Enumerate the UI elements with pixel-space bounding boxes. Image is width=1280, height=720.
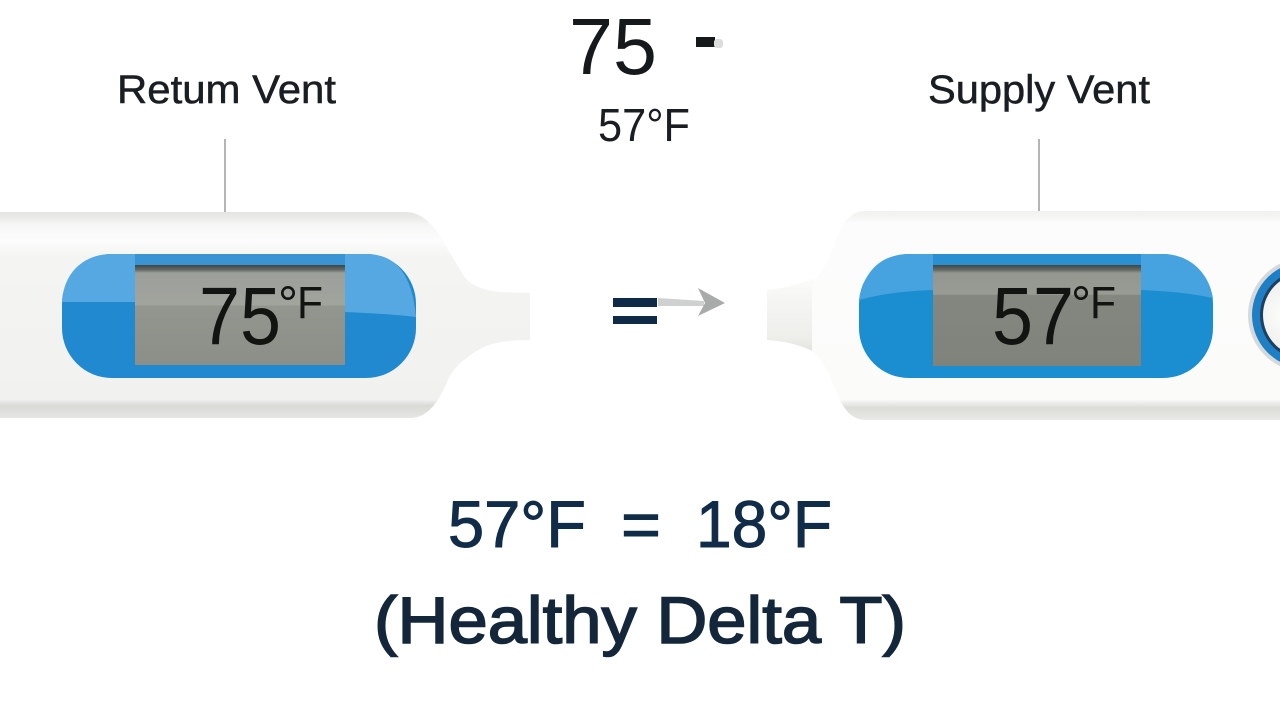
top equation: 57°F: 57°F <box>598 99 690 151</box>
leader line: supply vent <box>1038 139 1040 211</box>
LCD reading: ° <box>278 276 298 332</box>
LCD reading: 57 <box>992 271 1074 362</box>
result equation <box>448 487 832 561</box>
thermometer: supply vent <box>767 211 1280 420</box>
equals sign with arrow <box>613 288 725 324</box>
leader line: return vent <box>224 139 226 212</box>
top equation: 75 minus <box>569 2 723 91</box>
minus sign <box>696 37 715 47</box>
LCD reading: 75 <box>199 271 281 362</box>
LCD screen <box>135 265 345 365</box>
result equation: = <box>621 487 661 561</box>
thermometer body <box>812 211 1280 420</box>
blue display bezel <box>62 254 416 378</box>
result equation: 18°F <box>696 487 832 561</box>
thermometer body <box>0 212 530 418</box>
LCD reading: F <box>1090 277 1116 328</box>
result equation: 57°F <box>448 487 586 561</box>
label: supply vent: Supply Vent <box>928 68 1150 112</box>
LCD screen <box>933 265 1141 366</box>
power button <box>1248 258 1280 372</box>
blue display bezel <box>859 254 1213 378</box>
probe tip <box>767 278 815 352</box>
label: return vent: Retum Vent <box>117 68 336 112</box>
LCD reading: ° <box>1071 276 1091 332</box>
equals sign <box>613 298 657 324</box>
arrow <box>658 288 725 316</box>
LCD reading: F <box>297 277 323 328</box>
thermometer: return vent <box>0 212 530 418</box>
top equation: 75 minus: 75 <box>569 2 657 91</box>
minus artefact <box>714 39 723 48</box>
result caption: (Healthy Delta T) <box>374 583 906 657</box>
